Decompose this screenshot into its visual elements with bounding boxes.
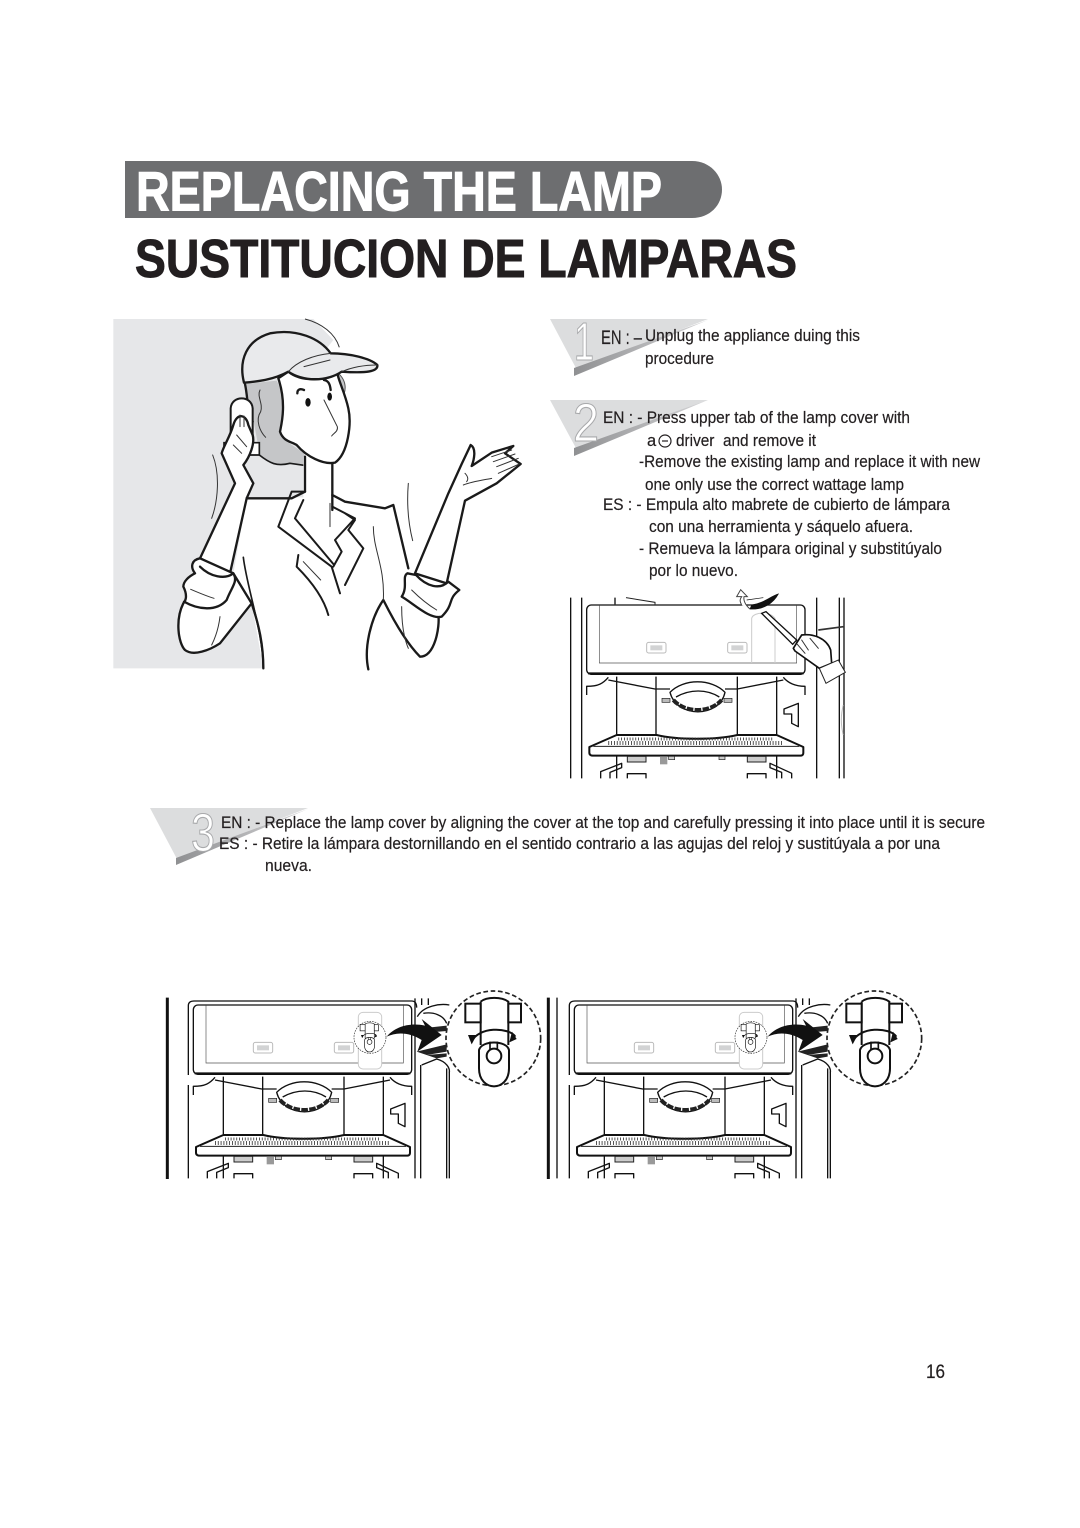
step 2: banner and number: 2 xyxy=(573,393,599,453)
diagram: lamp cover twist detail, left xyxy=(167,991,541,1179)
step 3 text: nueva. xyxy=(265,857,312,875)
step 2 text: - Remueva la lámpara original y substitúyalo xyxy=(639,540,942,558)
step 1 text: procedure xyxy=(645,349,714,368)
step 1: banner and number xyxy=(550,312,708,376)
illustration: woman on the phone gesturing xyxy=(113,319,521,669)
step 3 text: EN : - Replace the lamp cover by aligning the cover at the top and carefully pressing it into place until it is secure xyxy=(221,814,985,832)
step 1 text: Unplug the appliance duing this xyxy=(645,326,860,345)
step 1: banner and number: 1 xyxy=(574,312,594,372)
step 2 text: driver and remove it xyxy=(676,432,816,450)
step 1 text: EN : – xyxy=(601,328,642,349)
step 3 text xyxy=(219,814,985,875)
title banner: Replacing the Lamp: REPLACING THE LAMP xyxy=(136,160,662,222)
page number: 16 xyxy=(926,1362,945,1383)
step 3: banner and number xyxy=(150,803,308,865)
step 2 text xyxy=(603,409,981,580)
diagram: prying off the lamp cover with a screwdriver xyxy=(571,590,845,778)
step 3 text: ES : - Retire la lámpara destornillando en el sentido contrario a las agujas del reloj y sustitúyala a por una xyxy=(219,835,941,853)
step 2 text: a xyxy=(647,432,657,450)
step 2 text: EN : - Press upper tab of the lamp cover with xyxy=(603,409,910,427)
heading: Sustitucion de Lamparas: SUSTITUCION DE LAMPARAS xyxy=(135,229,797,289)
step 2 text: -Remove the existing lamp and replace it with new xyxy=(639,452,981,471)
diagram: lamp cover twist detail, right xyxy=(548,991,922,1179)
step 2 text: por lo nuevo. xyxy=(649,562,738,580)
step 3: banner and number: 3 xyxy=(191,803,215,863)
step 1 text xyxy=(601,326,860,368)
step 2: banner and number xyxy=(550,393,708,456)
step 2 text: one only use the correct wattage lamp xyxy=(645,475,904,494)
step 2 text: con una herramienta y sáquelo afuera. xyxy=(649,518,913,536)
step 2 text: ES : - Empula alto mabrete de cubierto de lámpara xyxy=(603,496,951,514)
